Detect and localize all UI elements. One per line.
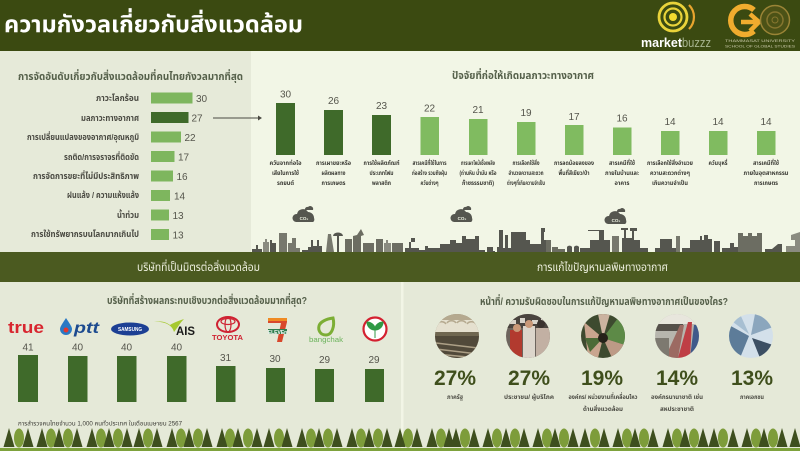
logo: Thammasat GO: SCHOOL OF GLOBAL STUDIES	[725, 44, 796, 48]
stat: citizens: ประชาชน/ ผู้บริโภค	[504, 393, 554, 401]
ranking values: 16	[176, 172, 188, 183]
logo: Toyota	[212, 317, 243, 342]
bar labels: causes: สารเคมีที่ใช้	[753, 158, 779, 167]
logo: Samsung	[111, 322, 149, 336]
bar labels: causes: ควันบุหรี่	[708, 158, 728, 167]
bar labels: causes: สารเคมีที่ใช้ในการ	[412, 158, 446, 167]
bar chart: causes: 19	[520, 108, 532, 119]
stat: government: 27%	[434, 367, 476, 390]
bar labels: causes: ก่อสร้าง รวมถึงฝุ่น	[412, 169, 447, 177]
bar labels: causes: การลดน้อยลงของ	[554, 160, 594, 167]
bar labels: causes: เสียในการใช้	[272, 170, 299, 177]
bar chart: causes: 14	[712, 117, 724, 128]
ranking values: 13	[172, 211, 184, 222]
bar chart: causes: 26	[328, 96, 339, 107]
skyline illustration	[252, 228, 800, 252]
ranking values: 17	[178, 152, 189, 164]
ranking values: 27	[191, 114, 203, 124]
bar chart: companies	[18, 342, 384, 402]
ranking labels: การใช้ทรัพยากรบนโลกมากเกินไป	[31, 229, 139, 239]
ranking labels: รถติด/การจราจรที่ติดขัด	[64, 151, 139, 162]
stat: international organisations	[651, 367, 703, 413]
bar chart: causes: 22	[424, 104, 435, 114]
stat: international organisations: 14%	[656, 367, 698, 390]
bar chart: causes: 23	[376, 101, 387, 112]
band title: friendly companies: บริษัทที่เป็นมิตรต่อสิ่งแวดล้อม	[137, 259, 260, 274]
photo: private sector	[729, 314, 773, 358]
stat: government	[434, 367, 476, 401]
bar chart: companies: 40	[72, 342, 83, 354]
right section band	[400, 252, 800, 282]
icon: CO2 cloud right	[604, 208, 626, 224]
heading: causes: ปัจจัยที่ก่อให้เกิดมลภาวะทางอากาศ	[452, 68, 594, 82]
logo: ptt	[60, 318, 100, 337]
logo: marketbuzzz: buzzz	[682, 35, 711, 50]
icon: CO2 cloud centre: CO₂	[458, 216, 466, 221]
ranking labels: มลภาวะทางอากาศ	[81, 113, 139, 123]
ranking labels: ฝนแล้ง / ความแห้งแล้ง	[67, 190, 139, 200]
ranking bars	[151, 92, 192, 240]
bar labels: causes: การเลือกใช้สิ่งอำนวย	[647, 158, 693, 167]
bar labels: causes: ภายในอุตสาหกรรม	[744, 171, 789, 177]
forest strip	[0, 428, 800, 451]
band title: solutions: การแก้ไขปัญหามลพิษทางอากาศ	[537, 260, 668, 274]
left section band	[0, 252, 400, 282]
icon: CO2 cloud centre	[450, 206, 472, 222]
logo: Thammasat GO	[725, 6, 796, 48]
bar chart: companies: 31	[220, 353, 231, 364]
bar labels: causes: การเกษตร	[322, 181, 346, 187]
ranking labels: การเปลี่ยนแปลงของอากาศ/อุณหภูมิ	[27, 131, 139, 142]
logo: 7-Eleven: ELEVEn	[268, 330, 287, 336]
bar labels: causes: พลาสติก	[372, 181, 391, 187]
bar labels: causes: ควันต่างๆ	[420, 179, 439, 187]
ranking labels: น้ำท่วม	[117, 209, 139, 220]
bar chart: companies: 30	[269, 354, 281, 365]
bar labels: causes	[270, 158, 789, 187]
bar labels: causes: อำนวยความสะดวก	[508, 170, 544, 177]
bar labels: causes: (ถ่านหิน น้ำมัน หรือ	[460, 168, 497, 177]
bar chart: causes: 14	[760, 117, 772, 128]
bar chart: companies: 29	[368, 355, 380, 366]
icon: CO2 cloud left: CO₂	[300, 216, 308, 221]
bar chart: causes	[276, 90, 776, 155]
logo: marketbuzzz	[641, 3, 711, 50]
bar labels: causes: การเผาขยะหรือ	[316, 160, 351, 167]
logo: KBank	[364, 318, 386, 340]
logo: 7-Eleven	[268, 318, 287, 342]
bar labels: causes: รถยนต์	[277, 181, 294, 187]
panel: responsibility	[401, 282, 800, 451]
bar labels: causes: ความสะดวกต่างๆ	[650, 169, 690, 177]
logo: Samsung: SAMSUNG	[118, 327, 142, 333]
logo: ptt: ptt	[73, 320, 100, 337]
ranking values: 13	[172, 230, 184, 242]
panel: ranking of concerns	[0, 51, 251, 252]
photo: government	[435, 314, 479, 358]
bar labels: causes: ผลิตผลทาง	[322, 171, 346, 177]
bar labels: causes: เกินความจำเป็น	[652, 179, 688, 187]
logo: marketbuzzz: market	[641, 35, 683, 50]
logo: Bangchak: bangchak	[309, 335, 343, 344]
ranking labels: การจัดการขยะที่ไม่มีประสิทธิภาพ	[33, 170, 139, 181]
stat: government: ภาครัฐ	[447, 393, 463, 401]
ranking values: 22	[184, 133, 196, 144]
icon: CO2 cloud right: CO₂	[612, 218, 620, 223]
photo: citizens	[506, 314, 550, 358]
logo: Thammasat GO: THAMMASAT UNIVERSITY	[725, 39, 796, 43]
bar chart: causes: 21	[472, 105, 484, 116]
stat: private sector	[731, 367, 773, 401]
bar labels: causes: ต่างๆที่เกินความจำเป็น	[507, 178, 545, 187]
subheading: responsibility: หน้าที่/ ความรับผิดชอบในการแก้ปัญหามลพิษทางอากาศเป็นของใคร?	[480, 294, 728, 308]
bar labels: causes: การเลือกใช้สิ่ง	[512, 158, 540, 167]
ranking labels	[27, 93, 139, 239]
bar labels: causes: การใช้ผลิตภัณฑ์	[364, 160, 400, 167]
logo: Bangchak	[309, 318, 343, 344]
title: ความกังวลเกี่ยวกับสิ่งแวดล้อม	[4, 8, 303, 37]
logo: true: true	[8, 318, 44, 337]
panel: friendly companies	[0, 282, 402, 428]
ranking values: 30	[196, 94, 207, 105]
bar labels: causes: อาคาร	[614, 181, 630, 187]
header banner	[0, 0, 800, 51]
ranking values: 14	[174, 192, 185, 202]
stat: private sector: 13%	[731, 367, 773, 390]
bar chart: causes: 30	[280, 90, 291, 100]
bar chart: causes: 17	[568, 112, 580, 123]
bar labels: causes: พื้นที่สีเขียว/ป่า	[558, 168, 590, 177]
bar chart: causes: 16	[616, 114, 628, 124]
icon: CO2 cloud left	[292, 206, 314, 222]
panel: causes of air pollution	[251, 51, 800, 252]
bar labels: causes: ควันจากท่อไอ	[270, 159, 302, 167]
bar chart: companies: 40	[171, 342, 182, 354]
footnote: การสำรวจคนไทยจำนวน 1,000 คนทั่วประเทศ ในเดือนเมษายน 2567	[18, 419, 183, 428]
bar labels: causes: ก๊าซธรรมชาติ)	[462, 180, 494, 187]
bar labels: causes: การเผาไหม้เชื้อเพลิง	[461, 158, 495, 167]
photo: international organisations	[655, 314, 699, 358]
heading: ranking: การจัดอันดับเกี่ยวกับสิ่งแวดล้อมที่คนไทยกังวลมากที่สุด	[18, 69, 243, 83]
bar labels: causes: สารเคมีที่ใช้	[609, 158, 635, 167]
stat: international organisations: สหประชาชาติ	[660, 406, 694, 413]
logo: Toyota: TOYOTA	[212, 335, 243, 342]
bar chart: companies: 41	[22, 342, 34, 354]
stat: environmental organisations: ด้านสิ่งแวดล้อม	[583, 404, 623, 413]
bar labels: causes: การเกษตร	[754, 181, 778, 187]
stat: environmental organisations: 19%	[581, 367, 623, 390]
subheading: companies: บริษัทที่สร้างผลกระทบเชิงบวกต่อสิ่งแวดล้อมมากที่สุด?	[107, 293, 307, 307]
logo: AIS	[154, 319, 195, 338]
bar labels: causes: ประเภทโฟม	[370, 171, 394, 177]
bar chart: companies: 40	[121, 342, 132, 354]
bar chart: causes: 14	[664, 117, 676, 128]
bar labels: causes: ภายในบ้านและ	[605, 170, 639, 177]
ranking values	[172, 94, 207, 242]
stat: private sector: ภาคเอกชน	[740, 394, 764, 401]
arrow: pollution to causes	[213, 116, 262, 120]
photo: environmental organisations	[581, 314, 625, 358]
stat: international organisations: องค์กรนานาชาติ เช่น	[651, 393, 703, 401]
stat: citizens	[504, 367, 554, 401]
stat: environmental organisations	[568, 367, 638, 413]
logo: AIS: AIS	[176, 326, 195, 338]
ranking labels: ภาวะโลกร้อน	[96, 93, 139, 103]
stat: citizens: 27%	[508, 367, 550, 390]
stat: environmental organisations: องค์กร/ หน่วยงานที่เคลื่อนไหว	[568, 392, 638, 401]
bar chart: companies: 29	[319, 355, 330, 366]
